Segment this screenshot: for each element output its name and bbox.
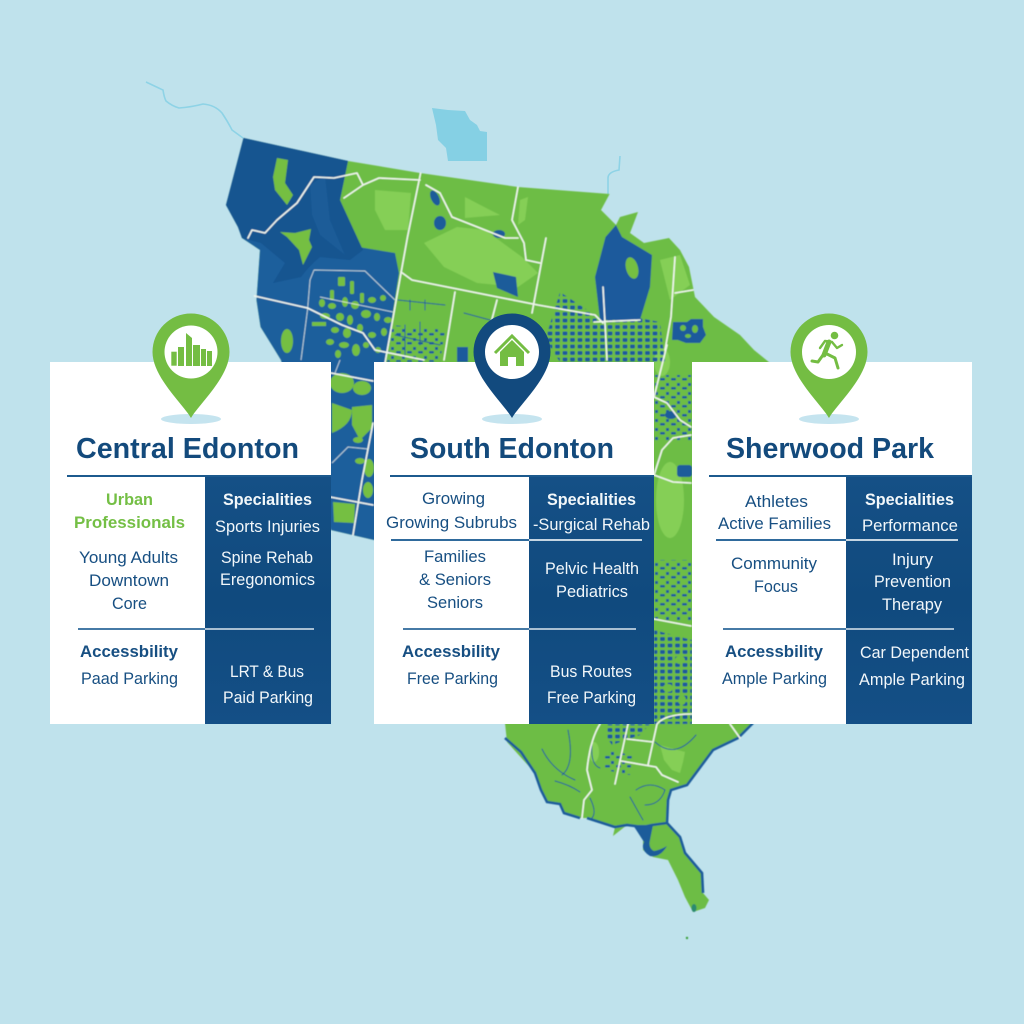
panel: South Edonton <box>374 314 654 724</box>
specialities text: Pediatrics <box>556 582 628 601</box>
upper row divider <box>716 539 958 541</box>
light green areas <box>375 190 690 773</box>
green neighbourhood blobs <box>312 277 392 358</box>
specialities text: -Surgical Rehab <box>533 515 650 534</box>
title divider <box>390 475 654 477</box>
panel: Sherwood Park <box>692 314 972 724</box>
specialities text <box>533 490 650 601</box>
heading: Sherwood Park <box>726 433 935 465</box>
accessibility text: Ample Parking <box>722 669 827 688</box>
audience text: Growing Subrubs <box>386 513 517 532</box>
specialities text: Specialities <box>547 490 636 509</box>
icon: green pin with runner <box>790 314 868 418</box>
accessibility text: Accessbility <box>402 642 501 661</box>
accessibility text: Accessbility <box>725 642 824 661</box>
blue west district <box>226 138 400 540</box>
accessibility text <box>402 642 501 688</box>
specialities text: Sports Injuries <box>215 517 320 536</box>
title divider <box>67 475 331 477</box>
audience text: Urban <box>106 490 153 509</box>
transit text: LRT & Bus <box>230 662 304 681</box>
title divider <box>709 475 972 477</box>
specialities text: Pelvic Health <box>545 559 639 578</box>
row divider <box>78 628 314 630</box>
audience text: Growing <box>422 489 485 508</box>
accessibility text: Free Parking <box>407 669 498 688</box>
lake <box>432 108 487 161</box>
river northwest <box>146 82 243 138</box>
transit text: Ample Parking <box>859 670 965 689</box>
icon: green pin with city skyline <box>152 314 230 418</box>
specialities text: Specialities <box>223 490 312 509</box>
audience text: Families <box>424 547 486 566</box>
audience text: Athletes <box>745 492 808 511</box>
audience text <box>386 489 517 612</box>
upper row divider <box>391 539 642 541</box>
pin shadow <box>482 414 542 424</box>
green streets lines <box>395 300 696 820</box>
card background <box>692 362 972 724</box>
small islet <box>686 937 688 939</box>
bay <box>633 825 667 856</box>
south coast <box>505 723 753 893</box>
pin shadow <box>161 414 221 424</box>
audience text: Downtown <box>89 571 169 590</box>
audience text: Community <box>731 554 817 573</box>
audience text: Active Families <box>718 514 831 533</box>
blue city blocks <box>545 292 612 362</box>
audience text: Focus <box>754 577 798 596</box>
specialities column <box>529 476 654 724</box>
audience text: Young Adults <box>79 548 178 567</box>
green patches west <box>273 158 392 523</box>
audience text <box>718 492 831 596</box>
audience text: & Seniors <box>419 570 491 589</box>
transit text <box>547 662 636 707</box>
specialities column <box>205 476 331 724</box>
heading: Central Edonton <box>76 433 299 465</box>
accessibility text <box>722 642 827 688</box>
accessibility text: Accessbility <box>80 642 179 661</box>
icon: navy pin with house <box>474 314 550 418</box>
map land base <box>226 138 800 912</box>
specialities text: Therapy <box>882 595 942 614</box>
transit text <box>223 662 313 707</box>
audience text <box>74 490 185 613</box>
audience text: Professionals <box>74 513 185 532</box>
specialities text: Performance <box>862 516 958 535</box>
card background <box>374 362 654 724</box>
east blue district <box>595 225 652 320</box>
darker blue zones <box>226 138 363 283</box>
accessibility text: Paad Parking <box>81 669 178 688</box>
roads <box>248 173 420 238</box>
specialities column <box>846 476 972 724</box>
specialities text <box>215 490 320 589</box>
panel: Central Edonton <box>50 314 331 724</box>
specialities text: Prevention <box>874 572 951 591</box>
transit text <box>859 643 969 689</box>
small water bodies <box>428 189 692 477</box>
audience text: Core <box>112 594 147 613</box>
transit text: Bus Routes <box>550 662 632 681</box>
lower row divider <box>723 628 954 630</box>
transit text: Free Parking <box>547 688 636 707</box>
specialities text: Injury <box>892 550 933 569</box>
specialities text: Eregonomics <box>220 570 315 589</box>
transit text: Paid Parking <box>223 688 313 707</box>
heading: South Edonton <box>410 433 614 465</box>
transit text: Car Dependent <box>860 643 969 662</box>
card background <box>50 362 331 724</box>
specialities text: Spine Rehab <box>221 548 313 567</box>
specialities text: Specialities <box>865 490 954 509</box>
pin shadow <box>799 414 859 424</box>
lower row divider <box>403 628 636 630</box>
audience text: Seniors <box>427 593 483 612</box>
river northeast <box>608 156 620 194</box>
specialities text <box>862 490 958 614</box>
tip detail <box>692 904 696 912</box>
accessibility text <box>80 642 179 688</box>
map <box>226 138 800 939</box>
